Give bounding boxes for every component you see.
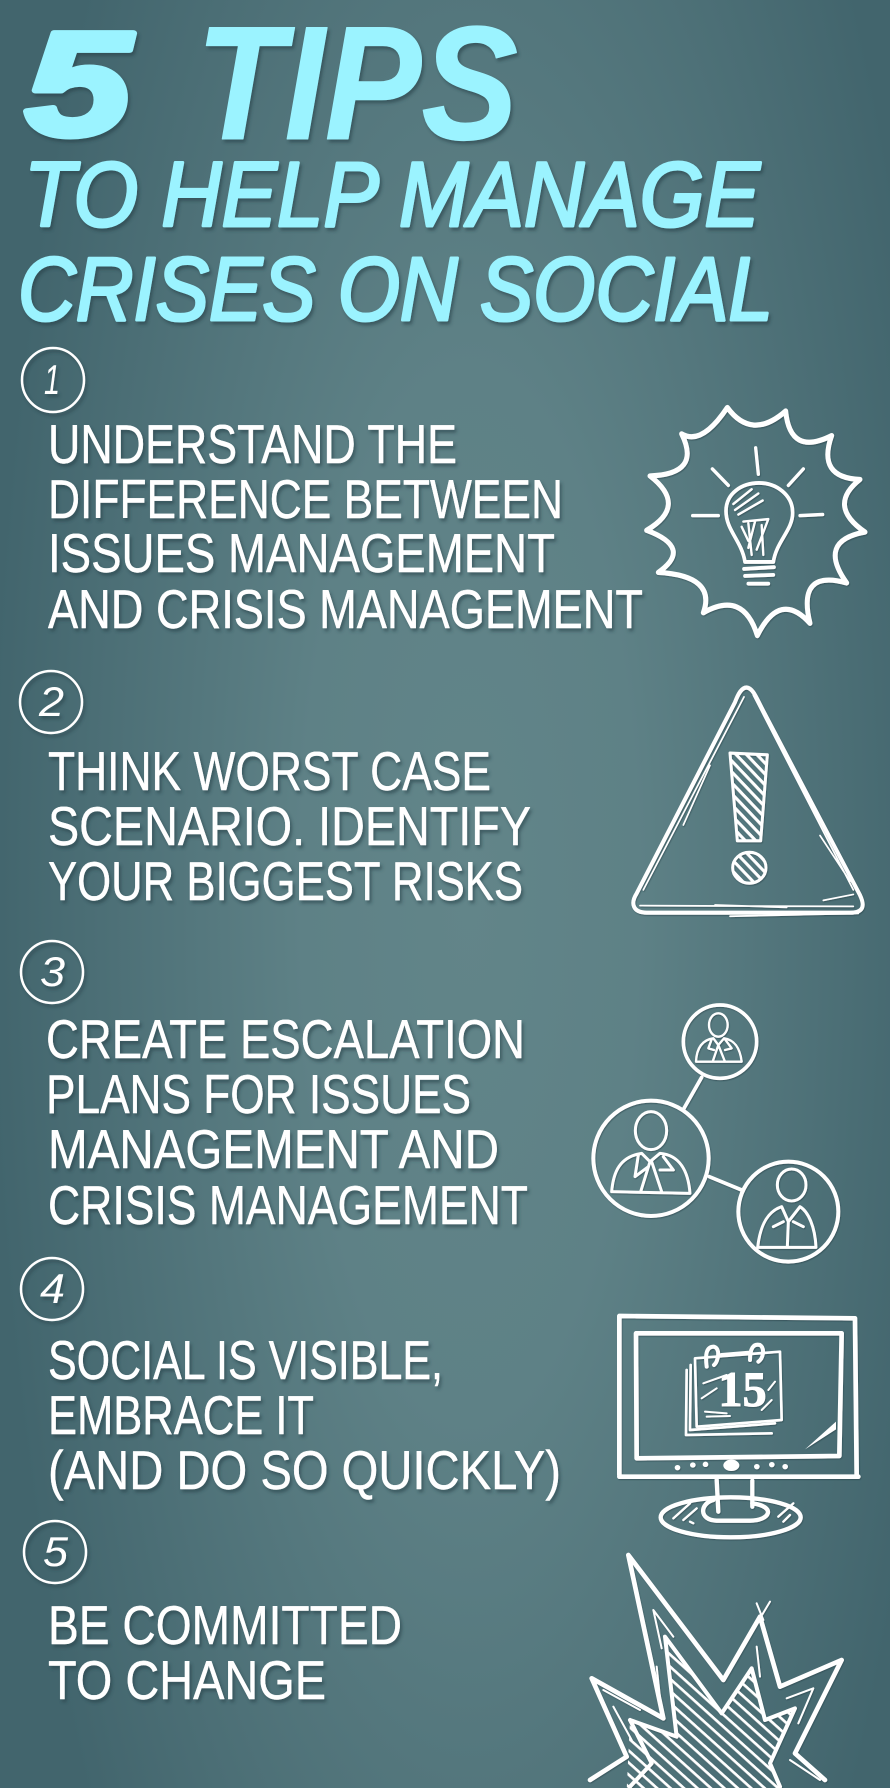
person top — [696, 1013, 742, 1062]
number badge 1: 1 — [44, 356, 60, 403]
tip 1 text — [48, 413, 643, 640]
number badge 4 — [21, 1258, 83, 1320]
tip 1 text: DIFFERENCE BETWEEN — [48, 468, 563, 530]
tip 1 — [22, 348, 643, 640]
tip 2 text: THINK WORST CASE — [48, 740, 491, 802]
number badge 5: 5 — [43, 1528, 69, 1575]
calendar date: 15 — [718, 1361, 767, 1417]
exclamation mark — [730, 753, 767, 883]
tip 4 text: SOCIAL IS VISIBLE, — [48, 1329, 443, 1391]
number badge 5 — [24, 1521, 86, 1583]
number badge 3 — [21, 941, 83, 1003]
tip 4 text: EMBRACE IT — [48, 1384, 314, 1446]
icon: people network — [593, 1005, 838, 1262]
tip 4 text — [48, 1329, 561, 1501]
tip 2 text — [48, 740, 531, 912]
tip 3 text: CRISIS MANAGEMENT — [48, 1174, 528, 1236]
title: to help manage: TO HELP MANAGE — [24, 144, 761, 246]
calendar — [686, 1345, 782, 1435]
icon: monitor with calendar — [619, 1316, 858, 1537]
tip 2 — [20, 671, 531, 912]
tip 2 text: SCENARIO. IDENTIFY — [48, 795, 531, 857]
number badge 2: 2 — [38, 678, 64, 725]
tip 4 — [21, 1258, 561, 1501]
tip 3 — [21, 941, 528, 1236]
number badge 1 — [22, 348, 84, 412]
tip 5 text — [48, 1594, 402, 1711]
tip 3 text — [46, 1008, 528, 1236]
tip 3 text: MANAGEMENT AND — [48, 1118, 499, 1180]
tip 4 text: (AND DO SO QUICKLY) — [48, 1439, 561, 1501]
title: crises on social: CRISES ON SOCIAL — [18, 240, 773, 340]
tip 5 text: BE COMMITTED — [48, 1594, 402, 1656]
icon: warning triangle — [633, 687, 863, 916]
tip 1 text: ISSUES MANAGEMENT — [48, 522, 555, 584]
title — [18, 0, 773, 340]
tip 3 text: CREATE ESCALATION — [46, 1008, 525, 1070]
icon: explosion burst — [590, 1555, 842, 1788]
title: 5: 5 — [25, 2, 134, 167]
tip 5 text: TO CHANGE — [48, 1649, 326, 1711]
tip 2 text: YOUR BIGGEST RISKS — [48, 850, 523, 912]
number badge 4: 4 — [40, 1265, 65, 1312]
tip 1 text: AND CRISIS MANAGEMENT — [48, 578, 643, 640]
tip 1 text: UNDERSTAND THE — [48, 413, 457, 475]
number badge 2 — [20, 671, 82, 733]
tip 5 — [24, 1521, 402, 1711]
person left — [612, 1112, 690, 1193]
number badge 3: 3 — [40, 948, 65, 995]
icon: light bulb in burst — [647, 408, 865, 636]
person right — [758, 1169, 816, 1247]
tip 3 text: PLANS FOR ISSUES — [46, 1063, 471, 1125]
